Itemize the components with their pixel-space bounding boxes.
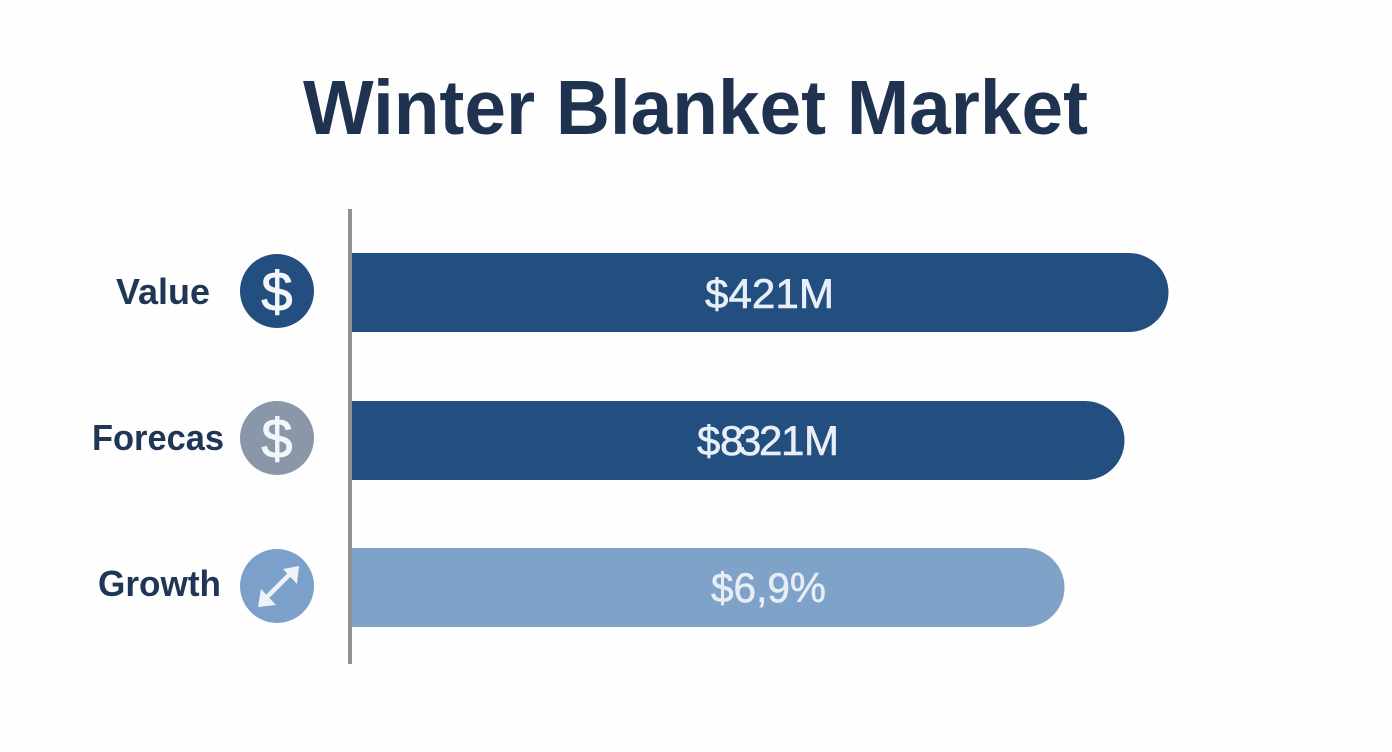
icon: dollar, value bbox=[240, 254, 314, 328]
axis line bbox=[348, 209, 352, 664]
icon: dollar, value: $ bbox=[261, 260, 293, 323]
bar: growth bbox=[352, 548, 1064, 627]
title: Winter Blanket Market bbox=[303, 65, 1088, 151]
chart: market bars bbox=[348, 209, 1168, 664]
icon: double arrow, growth bbox=[240, 549, 314, 623]
bar: value: $421M bbox=[705, 270, 834, 317]
bar: forecast: $8321M bbox=[697, 417, 839, 464]
row label: growth: Growth bbox=[98, 563, 221, 604]
bar: value bbox=[352, 253, 1168, 332]
icon: dollar, forecast bbox=[240, 401, 314, 475]
row label: forecast: Forecas bbox=[92, 417, 224, 458]
bar: forecast bbox=[352, 401, 1124, 480]
row label: value: Value bbox=[116, 271, 210, 312]
bar: growth: $6,9% bbox=[711, 564, 826, 611]
icon: dollar, forecast: $ bbox=[261, 407, 293, 470]
